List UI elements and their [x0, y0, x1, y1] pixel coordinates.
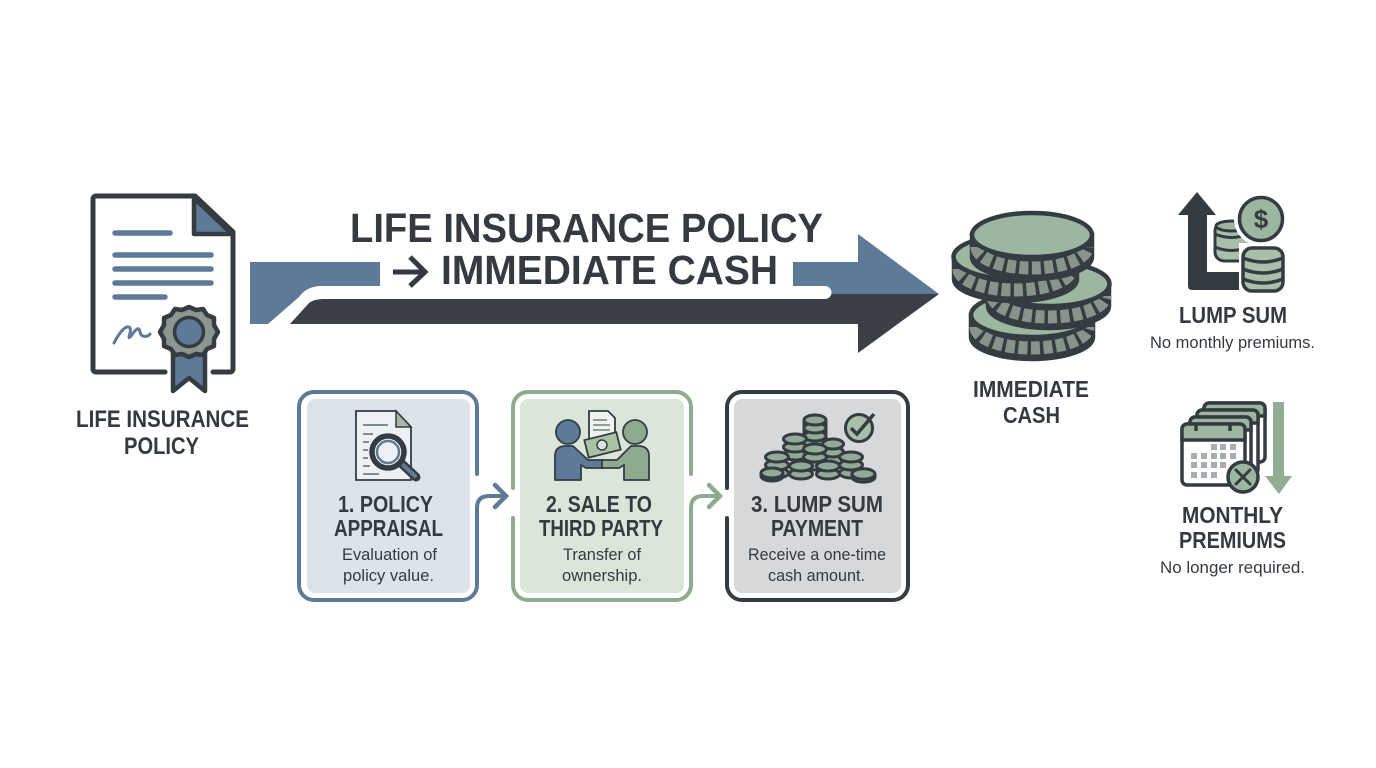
icon: lump sum arrow with coins [1178, 192, 1288, 296]
arrow: step 1 to step 2 [495, 485, 506, 507]
label: life insurance policy: POLICY [124, 433, 199, 460]
label: life insurance policy: LIFE INSURANCE [76, 406, 249, 433]
label: monthly premiums: PREMIUMS [1179, 527, 1286, 553]
text: policy appraisal description: Evaluation of [342, 545, 437, 564]
text: sale description [562, 545, 642, 585]
title: LIFE INSURANCE POLICY [350, 205, 823, 251]
title: IMMEDIATE CASH [441, 247, 778, 293]
heading: policy appraisal: APPRAISAL [334, 515, 443, 541]
icon: handshake sale [555, 411, 649, 480]
label: lump sum: LUMP SUM [1179, 302, 1287, 328]
arrow: step 2 to step 3 [709, 485, 720, 507]
heading: policy appraisal [334, 491, 443, 541]
label: lump sum: No monthly premiums. [1150, 333, 1315, 352]
icon text: dollar sign: $ [1254, 204, 1269, 234]
heading: sale to third party: THIRD PARTY [539, 515, 663, 541]
label: immediate cash: IMMEDIATE [973, 376, 1089, 402]
heading: policy appraisal: 1. POLICY [338, 491, 433, 517]
text: sale description: ownership. [562, 566, 642, 585]
label: immediate cash [973, 376, 1089, 428]
icon: document with magnifier [356, 411, 416, 480]
icon: title arrow [393, 257, 425, 286]
title [350, 205, 823, 293]
heading: lump sum payment: PAYMENT [771, 515, 863, 541]
label: monthly premiums: MONTHLY [1182, 502, 1283, 528]
panel: step 1 policy appraisal [299, 392, 506, 600]
label: monthly premiums [1160, 502, 1305, 577]
arrow: premiums going down [1265, 402, 1292, 494]
panel: step 2 sale to third party [513, 392, 720, 600]
text: sale description: Transfer of [563, 545, 641, 564]
label: monthly premiums: No longer required. [1160, 558, 1305, 577]
panel: step 3 lump sum payment [727, 392, 908, 600]
icon: coin pile with check mark [761, 414, 875, 482]
text: policy appraisal description [342, 545, 437, 585]
text: payment description: Receive a one-time [748, 545, 886, 564]
text: payment description [748, 545, 886, 585]
label: lump sum [1150, 302, 1315, 352]
heading: lump sum payment [751, 491, 883, 541]
text: policy appraisal description: policy value. [343, 566, 434, 585]
heading: lump sum payment: 3. LUMP SUM [751, 491, 883, 517]
heading: sale to third party: 2. SALE TO [546, 491, 652, 517]
label: life insurance policy [76, 406, 249, 460]
label: immediate cash: CASH [1003, 402, 1060, 428]
arrow: split blue and dark process arrow [250, 234, 939, 353]
icon: monthly premium calendars crossed out [1182, 403, 1265, 492]
icon: immediate cash coin stack [954, 213, 1110, 359]
icon: life insurance policy document [93, 196, 233, 391]
text: payment description: cash amount. [768, 566, 865, 585]
heading: sale to third party [539, 491, 663, 541]
